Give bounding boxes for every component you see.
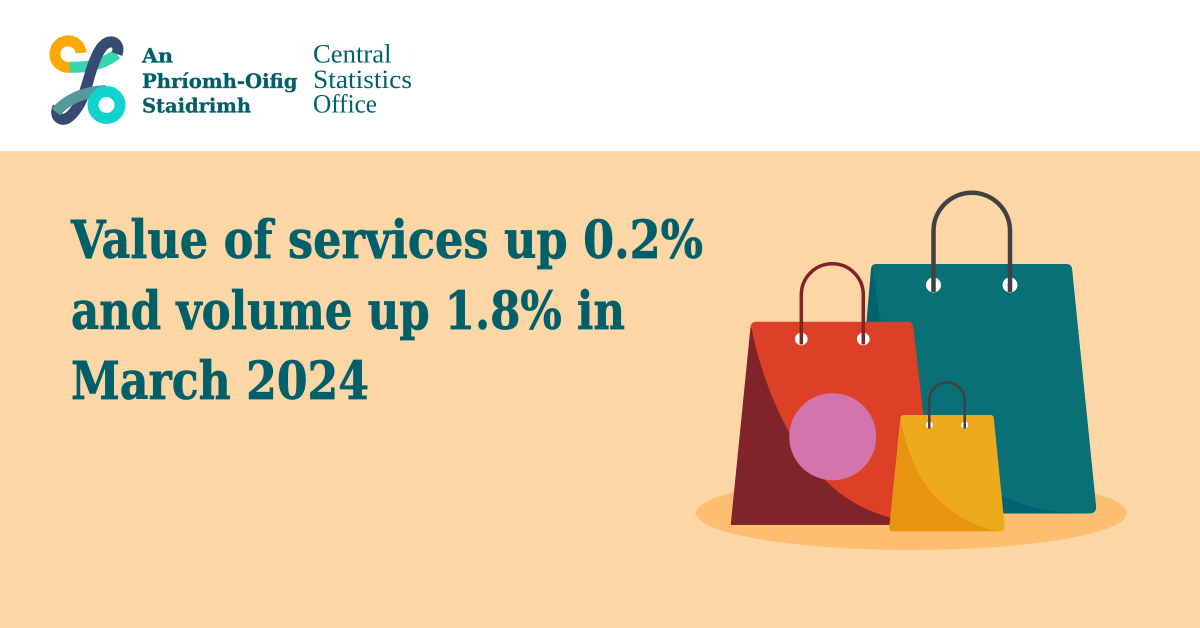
title: March 2024 [71,351,369,412]
Irish wordmark: Staidrimh [142,94,251,118]
Irish wordmark: Phríomh-Oifig [142,69,298,93]
yellow bag [889,382,1005,531]
icon: CSO knot mark [55,41,120,119]
title: and volume up 1.8% in [71,281,625,342]
Irish wordmark: An [141,44,173,68]
ground shadow [696,476,1127,550]
title [70,210,703,412]
handle [801,264,863,344]
Irish wordmark [141,44,298,118]
eyelets [926,422,933,428]
teal bag [850,193,1096,514]
logo [55,40,412,119]
English wordmark: Central [313,40,392,68]
title: Value of services up 0.2% [70,210,703,271]
eyelets [795,333,808,345]
English wordmark [313,40,412,118]
illustration: shopping bags [696,193,1127,550]
red bag [731,264,936,525]
English wordmark: Office [313,90,377,118]
eyelets [926,278,941,292]
English wordmark: Statistics [313,65,412,94]
handle [934,193,1010,292]
header band [0,0,1200,151]
handle [929,382,965,428]
pink circle [789,393,876,480]
